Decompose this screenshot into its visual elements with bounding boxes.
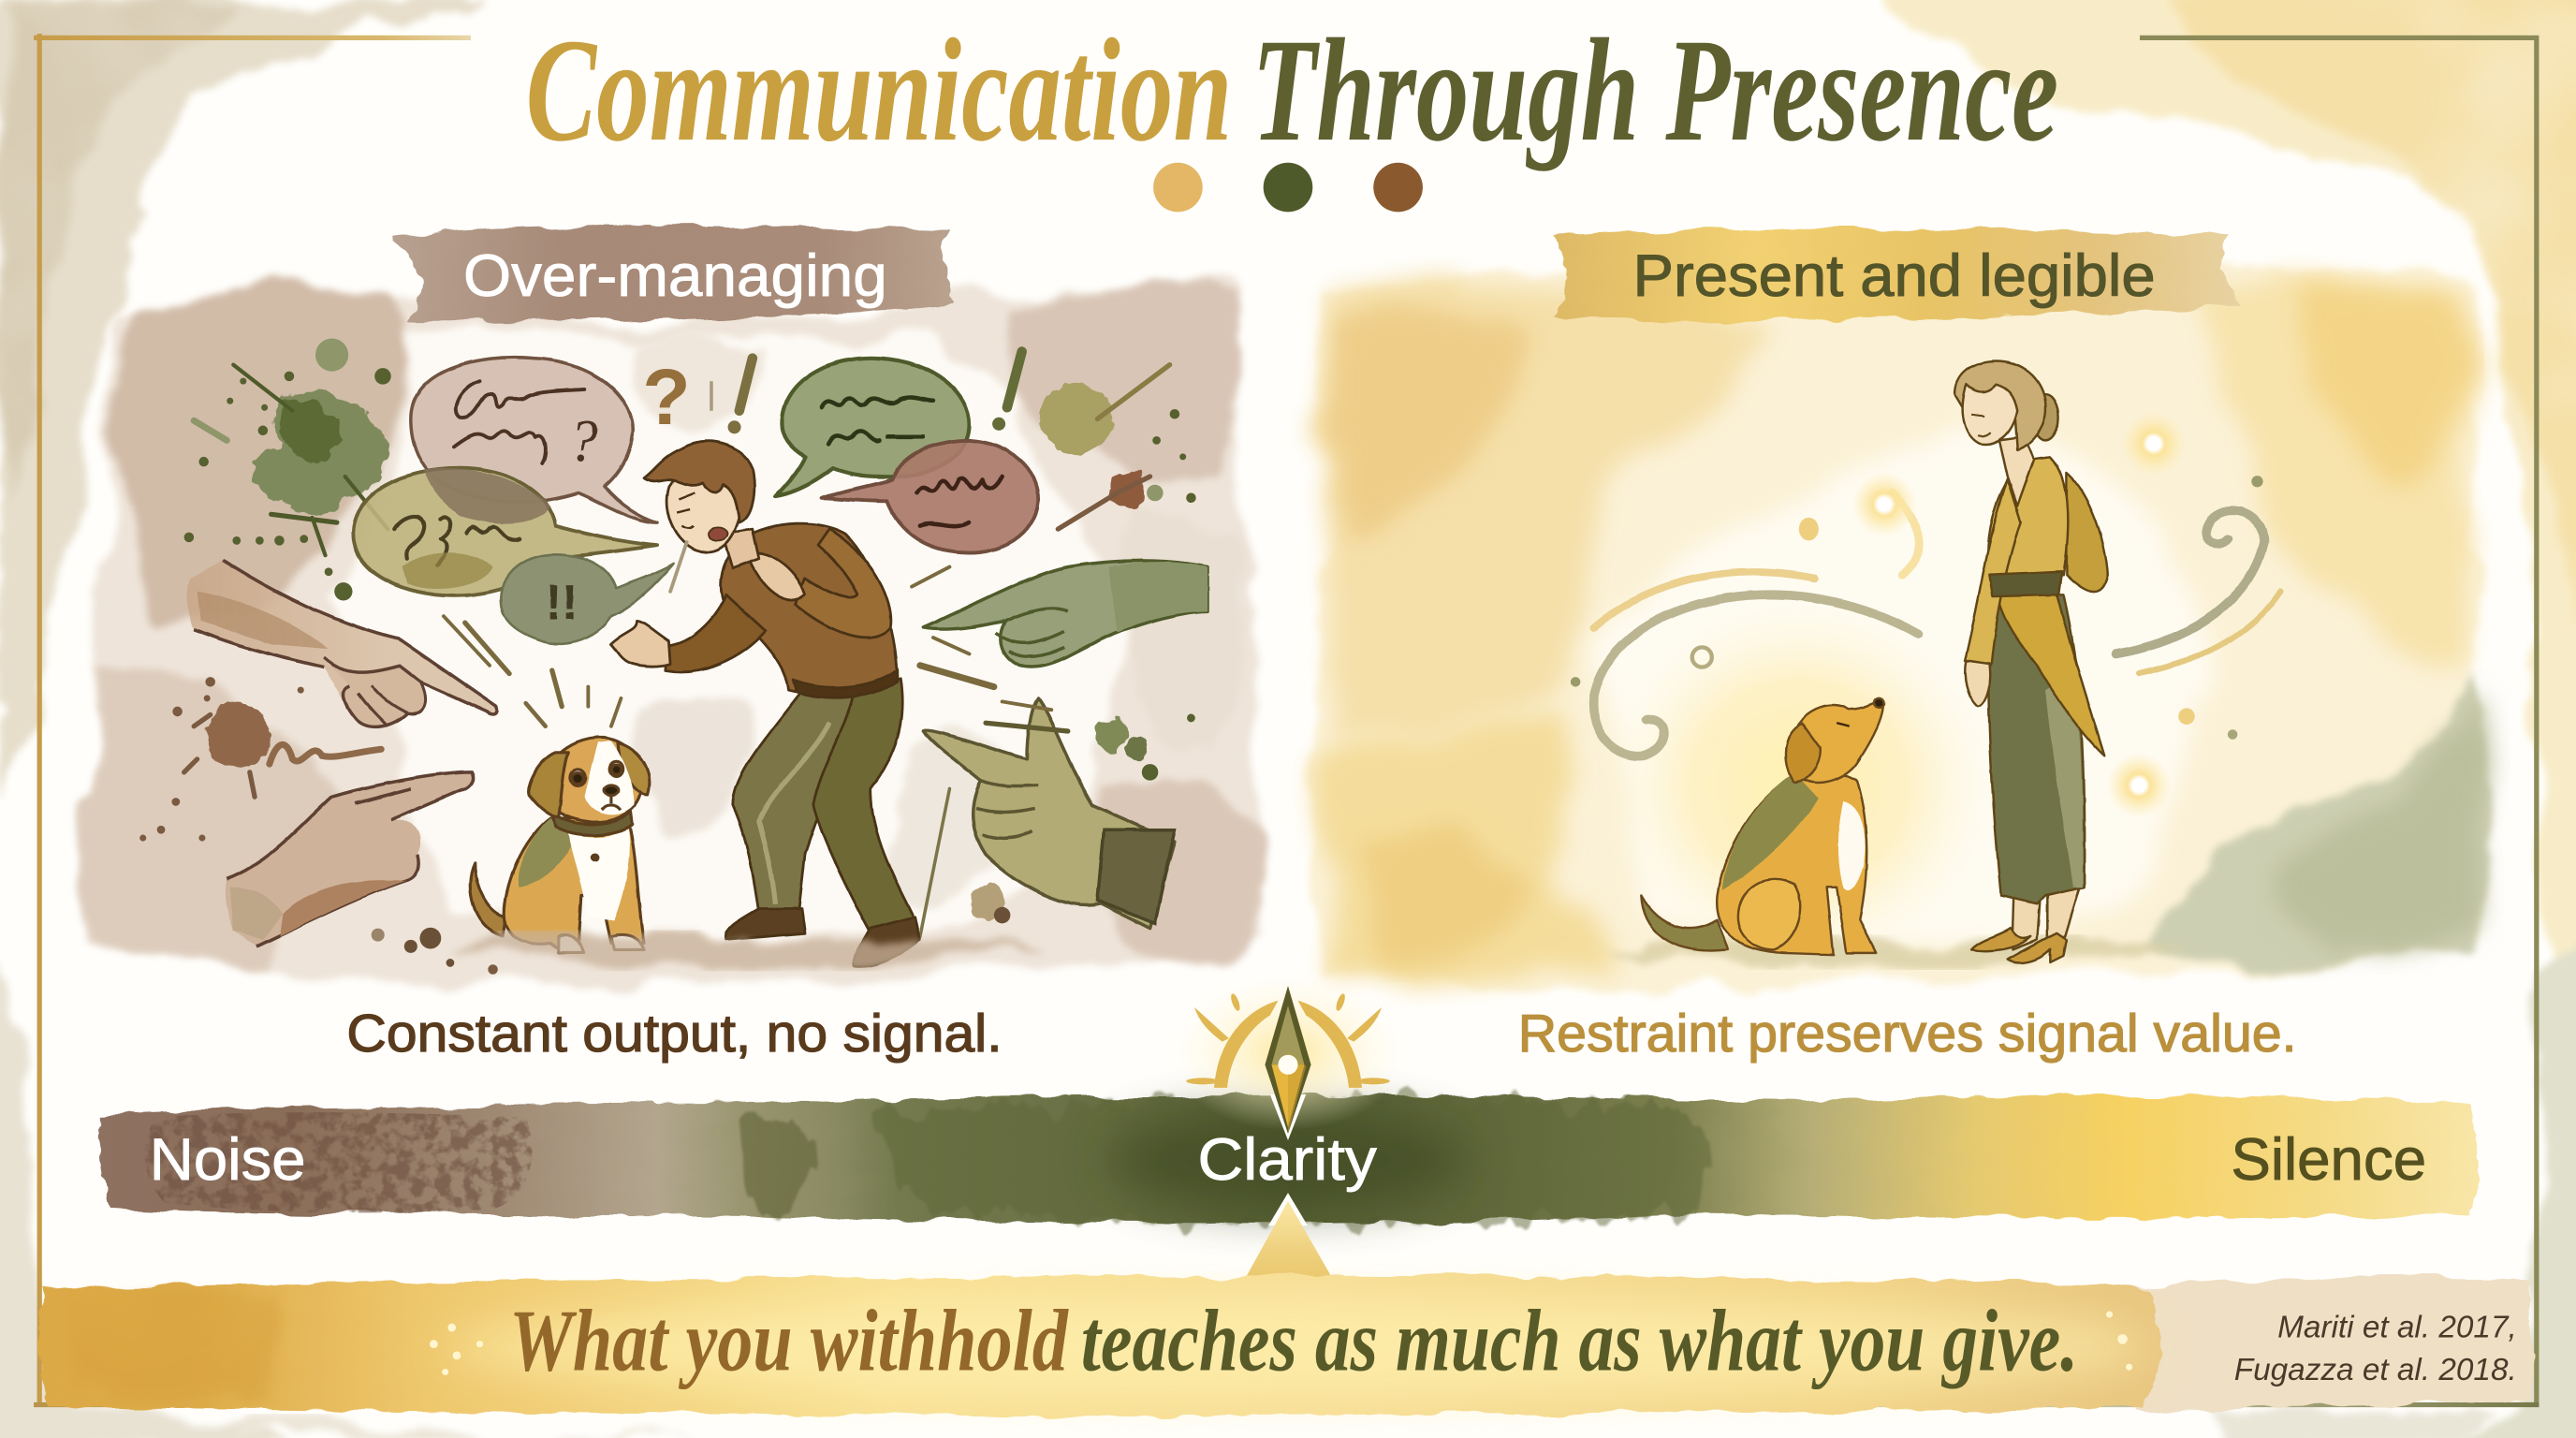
bubble: sage exclamations: !!: [546, 576, 578, 631]
dog: anxious puppy: [470, 738, 649, 953]
bubble: olive right: [775, 358, 970, 496]
bubble: sage exclamations: [501, 554, 674, 643]
connector pointer to takeaway: [1245, 1193, 1332, 1278]
dog: calm golden dog: [1641, 698, 1884, 955]
person: calm woman: [1955, 361, 2108, 962]
caption: left: Constant output, no signal.: [346, 1004, 1003, 1063]
bar labels: Silence: [2231, 1127, 2426, 1193]
heading banner: present and legible: [1554, 227, 2241, 321]
heading banner: over-managing: [394, 227, 956, 322]
title: Through Presence: [1251, 8, 2058, 172]
takeaway banner: [38, 1275, 2533, 1416]
heading banner: present and legible: Present and legible: [1633, 243, 2156, 309]
floating question and exclamation marks: ?: [642, 353, 691, 441]
citation: [2234, 1311, 2517, 1387]
panel wash: right: [1321, 273, 2484, 984]
panel: over-managing: [89, 277, 1257, 985]
sun arc and rays: [1186, 992, 1390, 1088]
pointing hand: upper left: [187, 560, 497, 726]
citation: Fugazza et al. 2018.: [2234, 1353, 2517, 1387]
heading banner: over-managing: Over-managing: [463, 243, 887, 309]
stress marks: [444, 542, 1068, 731]
takeaway text: What you withhold: [509, 1293, 1069, 1390]
takeaway text: teaches as much as what you give.: [1081, 1293, 2078, 1390]
bar labels: Clarity: [1197, 1127, 1377, 1193]
bar labels: [150, 1127, 2426, 1193]
paint splatters: [139, 339, 1196, 975]
person: stressed man: [611, 442, 920, 966]
bubble: brown top: ?: [568, 407, 598, 473]
bubble: brown right: [822, 440, 1038, 552]
pointing hand: lower right: [923, 698, 1175, 929]
title: [526, 8, 2058, 172]
title: Communication: [526, 8, 1232, 172]
pointing hand: lower left: [226, 772, 474, 946]
caption: right: Restraint preserves signal value.: [1518, 1004, 2297, 1063]
swirls: [1593, 493, 2280, 756]
sparkles: banner: [430, 1312, 2132, 1375]
darker wash in bar: [731, 1099, 1715, 1223]
spectrum bar: noise to silence: [99, 1095, 2477, 1224]
ground shadow: [444, 933, 1051, 968]
takeaway text: [509, 1293, 2078, 1390]
bubble: brown top: [411, 358, 657, 522]
ground shadow right: [1610, 937, 2195, 967]
bar labels: Noise: [150, 1127, 305, 1193]
pointing hand: upper right: [923, 561, 1208, 668]
white notch: [1270, 1094, 1306, 1140]
floating question and exclamation marks: [642, 352, 1022, 441]
glow around dog: [1602, 596, 1996, 975]
compass needle marker: [1170, 973, 1406, 1140]
palette dots: [1153, 163, 1423, 212]
citation: Mariti et al. 2017,: [2277, 1311, 2517, 1345]
bubble: olive-tan: [353, 468, 657, 595]
panel wash: left: [89, 277, 1257, 985]
speech bubbles: [353, 358, 1038, 643]
sparkles and motes: [1571, 411, 2263, 818]
panel: present and legible: [1321, 273, 2484, 984]
